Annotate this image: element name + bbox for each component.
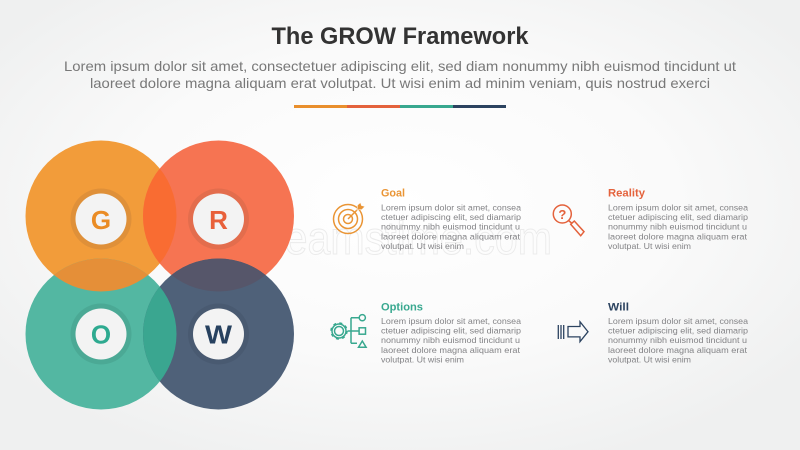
body text: Options [381,316,521,364]
body text: Reality: volutpat. Ut wisi enim [608,241,691,251]
icon: gear with shapes [331,315,366,347]
body text: Goal: ctetuer adipiscing elit, sed diamarip [381,212,521,222]
body text: Will: nonummy nibh euismod tincidunt u [608,335,747,345]
body text: Goal: laoreet dolore magna aliquam erat [381,231,521,241]
overlap: R and W [172,258,266,292]
subtitle: laoreet dolore magna aliquam erat volutpat. Ut wisi enim ad minim veniam, quis nostrud exerci [90,75,710,91]
circle: W [143,258,294,410]
circle: O [26,258,176,410]
overlap: O and W [143,286,176,382]
body text: Reality: nonummy nibh euismod tincidunt u [608,222,747,232]
title: The GROW Framework [272,23,529,50]
icon: arrow [558,322,588,342]
badge: R: R [209,205,228,235]
body text: Goal: Lorem ipsum dolor sit amet, consea [381,202,521,212]
badge: W: W [205,320,232,350]
body text: Reality: Lorem ipsum dolor sit amet, consea [608,202,748,212]
overlap: G and R [143,168,176,264]
body text: Goal: volutpat. Ut wisi enim [381,241,464,251]
title divider bar [294,105,506,108]
badge: W [188,304,249,364]
subtitle [64,58,736,91]
circle: R [143,140,294,292]
panel: Will [558,302,748,364]
overlap: G and O [54,258,148,292]
body text: Reality: laoreet dolore magna aliquam erat [608,231,748,241]
circle: G [26,140,176,292]
heading: Reality: Reality [608,188,645,200]
body text: Will: laoreet dolore magna aliquam erat [608,345,748,355]
overlapping GROW circles [26,140,294,410]
badge: O [70,304,132,364]
body text: Will: volutpat. Ut wisi enim [608,354,691,364]
body text: Options: Lorem ipsum dolor sit amet, consea [381,316,521,326]
body text: Reality: ctetuer adipiscing elit, sed diamarip [608,212,748,222]
body text: Will: Lorem ipsum dolor sit amet, consea [608,316,748,326]
panel: Reality [553,188,748,251]
heading: Goal: Goal [381,188,405,200]
panel: Options [331,302,521,364]
subtitle: Lorem ipsum dolor sit amet, consectetuer adipiscing elit, sed diam nonummy nibh euismod tincidunt ut [64,58,736,74]
badge: G [70,188,132,250]
body text: Options: ctetuer adipiscing elit, sed diamarip [381,326,521,336]
icon: magnifier with question mark: ? [558,207,566,222]
body text: Will [608,316,748,364]
badge: R [188,188,249,250]
body text: Options: laoreet dolore magna aliquam erat [381,345,521,355]
body text: Goal [381,202,521,251]
body text: Will: ctetuer adipiscing elit, sed diamarip [608,326,748,336]
watermark: dreamstime.com [248,212,552,264]
icon: target [334,202,365,234]
heading: Will: Will [608,302,629,314]
icon: magnifier with question mark [553,205,584,236]
body text: Options: nonummy nibh euismod tincidunt u [381,335,520,345]
body text: Reality [608,202,748,251]
heading: Options: Options [381,302,423,314]
badge: O: O [91,320,111,350]
badge: G: G [91,205,111,235]
body text: Goal: nonummy nibh euismod tincidunt u [381,222,520,232]
infographic canvas [26,26,748,410]
panel: Goal [334,188,521,251]
body text: Options: volutpat. Ut wisi enim [381,354,464,364]
